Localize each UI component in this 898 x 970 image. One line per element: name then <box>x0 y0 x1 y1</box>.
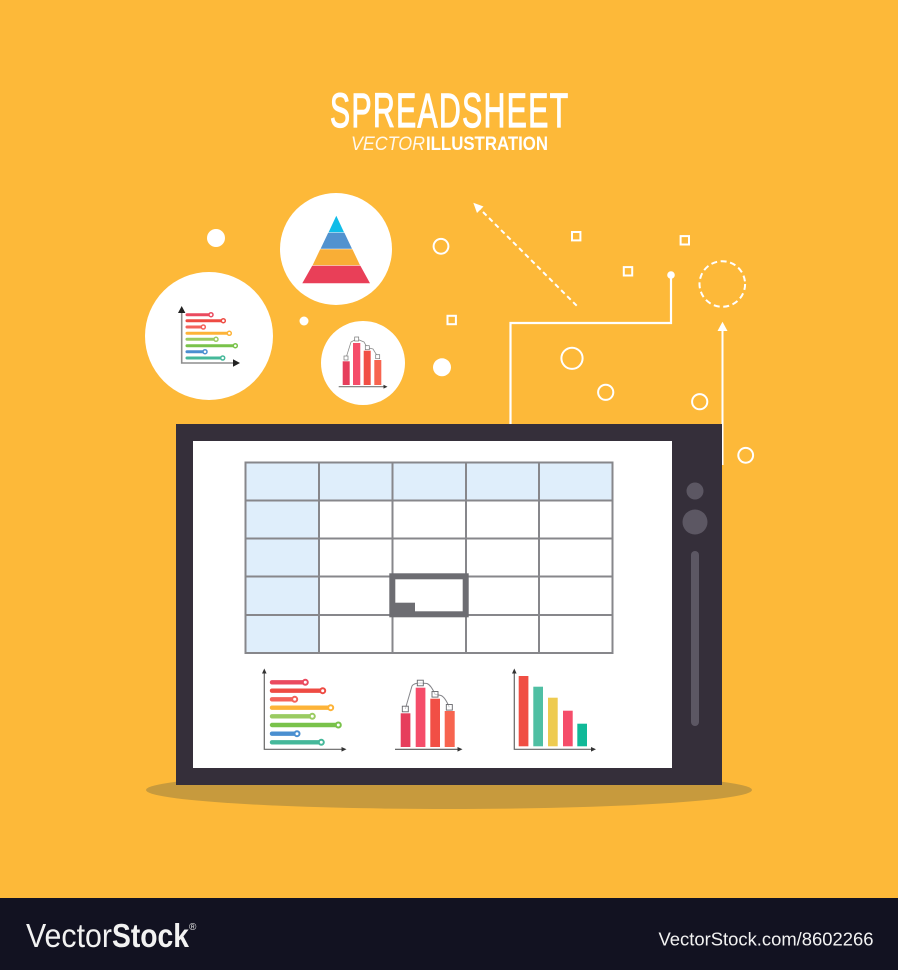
footer logo: Stock <box>112 917 190 954</box>
bubble: horizontal bar chart <box>145 272 273 400</box>
tablet screen <box>193 441 672 768</box>
tablet button small <box>686 482 704 500</box>
tablet body <box>176 424 722 785</box>
arrow: dashed diagonal <box>473 203 577 306</box>
footer registered mark: ® <box>189 922 197 933</box>
subtitle: vector illustration: VECTOR <box>351 134 425 155</box>
tablet device <box>176 424 722 785</box>
subtitle: vector illustration: ILLUSTRATION <box>426 134 548 155</box>
chart: horizontal bars <box>262 668 346 752</box>
small outlined squares <box>448 232 689 324</box>
selected cell <box>392 576 466 614</box>
small outlined circles <box>434 239 753 463</box>
spreadsheet grid <box>245 462 612 653</box>
dashed circle <box>700 261 745 307</box>
tablet shadow <box>146 771 752 809</box>
tablet slider <box>691 551 699 726</box>
footer logo: Vector <box>26 917 112 954</box>
tablet button large <box>682 510 708 534</box>
title <box>330 83 568 155</box>
connector line with end dot <box>510 271 675 424</box>
chart: columns with connector <box>395 680 462 752</box>
decorative dots on the left <box>207 229 451 376</box>
footer bar <box>0 898 898 970</box>
heading: spreadsheet: SPREADSHEET <box>330 83 568 138</box>
arrow: vertical up <box>718 322 728 465</box>
bubble: column chart with connector <box>321 321 405 405</box>
bubble: pyramid chart <box>280 193 392 305</box>
footer image id: VectorStock.com/8602266 <box>658 928 874 950</box>
chart: descending columns <box>512 668 596 752</box>
